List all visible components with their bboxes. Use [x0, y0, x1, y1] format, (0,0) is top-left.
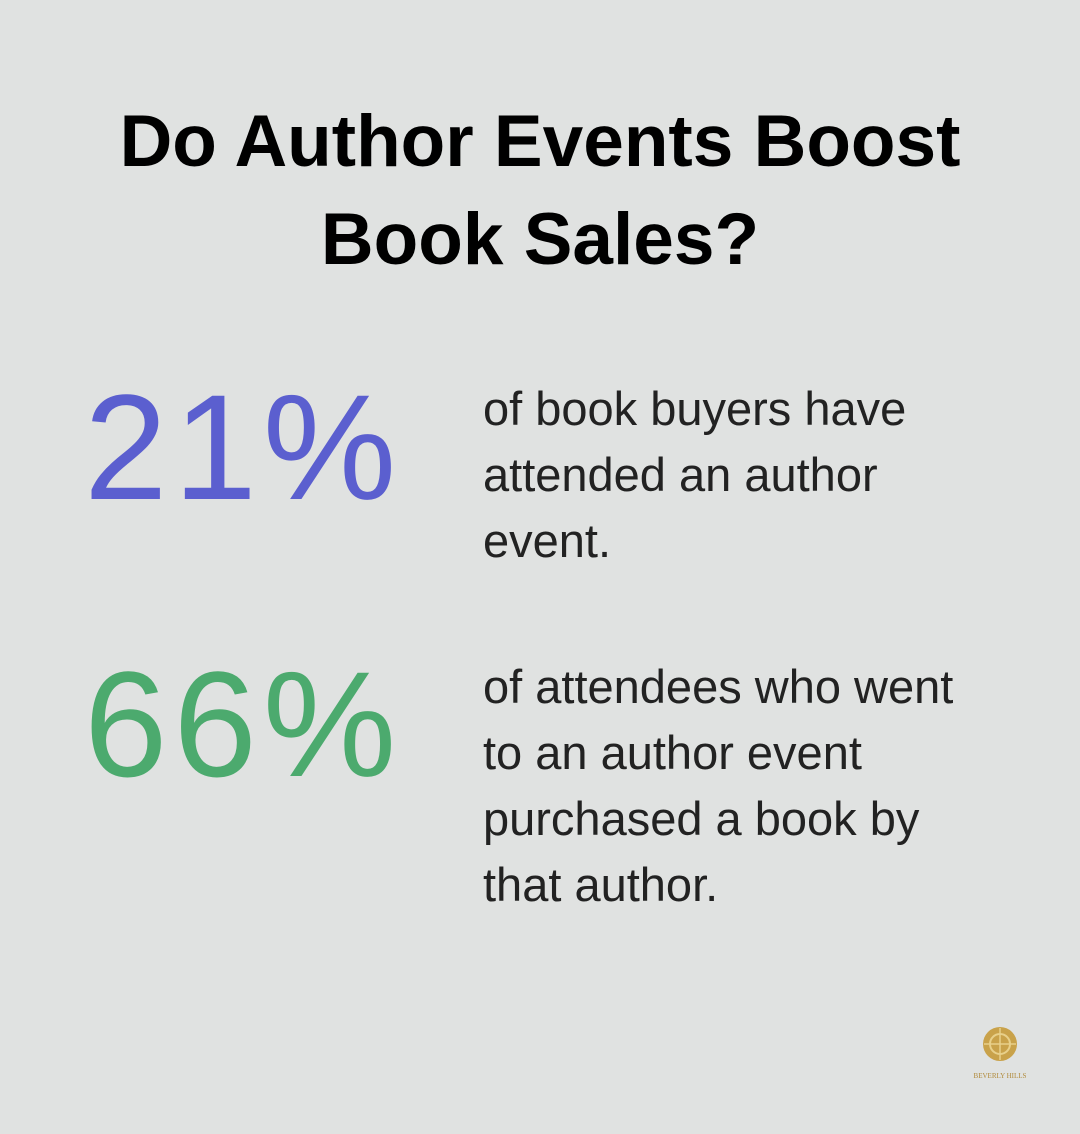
stat 2: description [483, 660, 953, 911]
stat 2: description: purchased a book by [483, 792, 919, 845]
title: Book Sales? [321, 199, 759, 280]
stat 1: description: attended an author [483, 448, 878, 501]
logo [974, 1027, 1026, 1080]
stat 2: description: of attendees who went [483, 660, 953, 713]
stat 1: number: 21% [84, 363, 402, 531]
title: Do Author Events Boost [120, 101, 960, 182]
stat 2: number: 66% [84, 640, 402, 808]
logo: BEVERLY HILLS [974, 1072, 1026, 1080]
stat 2: description: that author. [483, 858, 718, 911]
stat 2: description: to an author event [483, 726, 862, 779]
title [120, 101, 960, 280]
stat 1: description: event. [483, 514, 611, 567]
stat 1: description [483, 382, 906, 567]
stat 1: description: of book buyers have [483, 382, 906, 435]
